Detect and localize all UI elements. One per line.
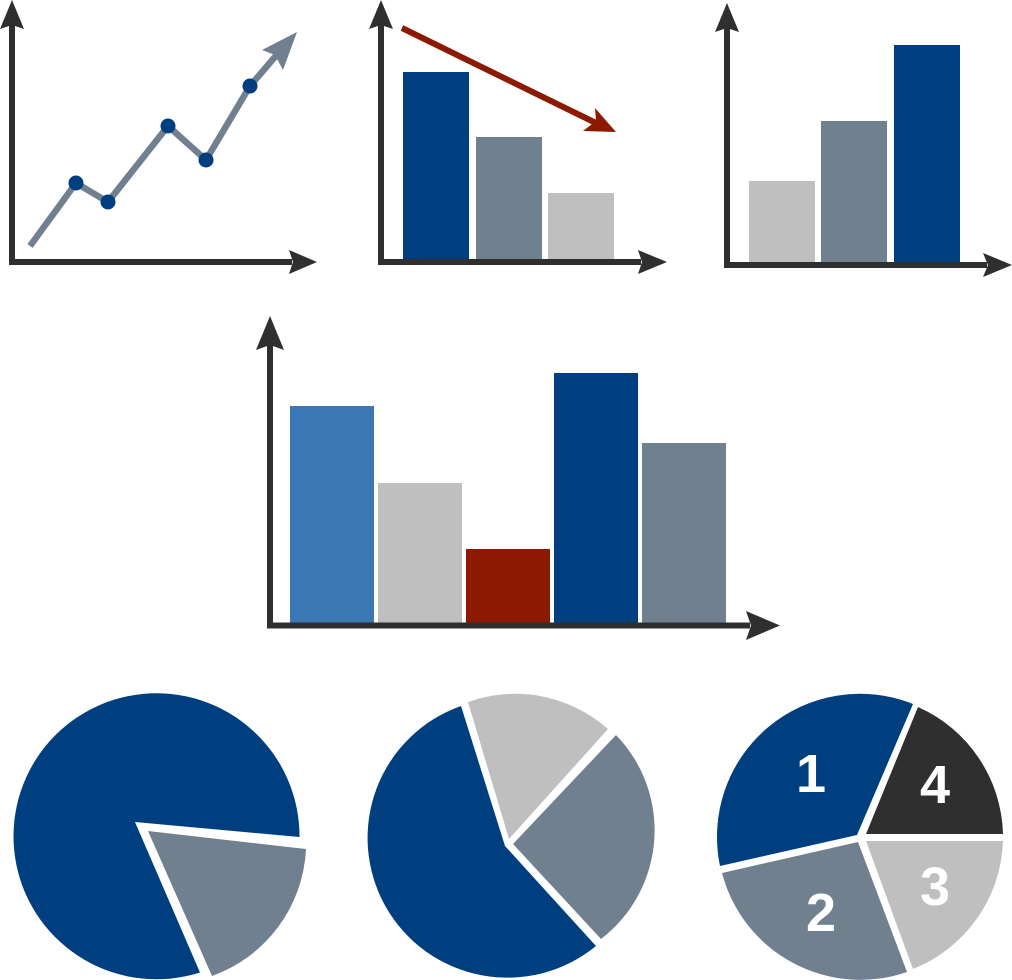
pie chart: three slices bbox=[368, 694, 655, 978]
slice 1: 1 bbox=[796, 744, 826, 804]
bar chart: five bars bbox=[256, 316, 780, 640]
slice 2: 2 bbox=[806, 883, 836, 943]
trend line with arrow bbox=[30, 32, 297, 246]
slice 3: 3 bbox=[920, 857, 950, 917]
bar chart: rising bars bbox=[715, 3, 1012, 277]
slice 4: 4 bbox=[920, 755, 950, 815]
slice 4 bbox=[866, 707, 1003, 834]
bars bbox=[749, 45, 960, 263]
data points bbox=[68, 78, 258, 210]
axes bbox=[715, 3, 1012, 277]
red down arrow bbox=[402, 28, 616, 132]
slice 1 bbox=[717, 694, 913, 866]
axes bbox=[369, 0, 667, 274]
bars bbox=[290, 373, 726, 623]
axes bbox=[256, 316, 780, 640]
bars bbox=[403, 72, 614, 260]
slice 2 bbox=[722, 842, 907, 980]
slice 3 bbox=[866, 841, 1003, 969]
line chart: rising trend bbox=[0, 0, 317, 274]
pie chart: four numbered slices bbox=[717, 694, 1003, 980]
pie chart: two slices bbox=[14, 693, 306, 979]
bar chart: falling trend bbox=[369, 0, 667, 274]
axes bbox=[0, 0, 317, 274]
